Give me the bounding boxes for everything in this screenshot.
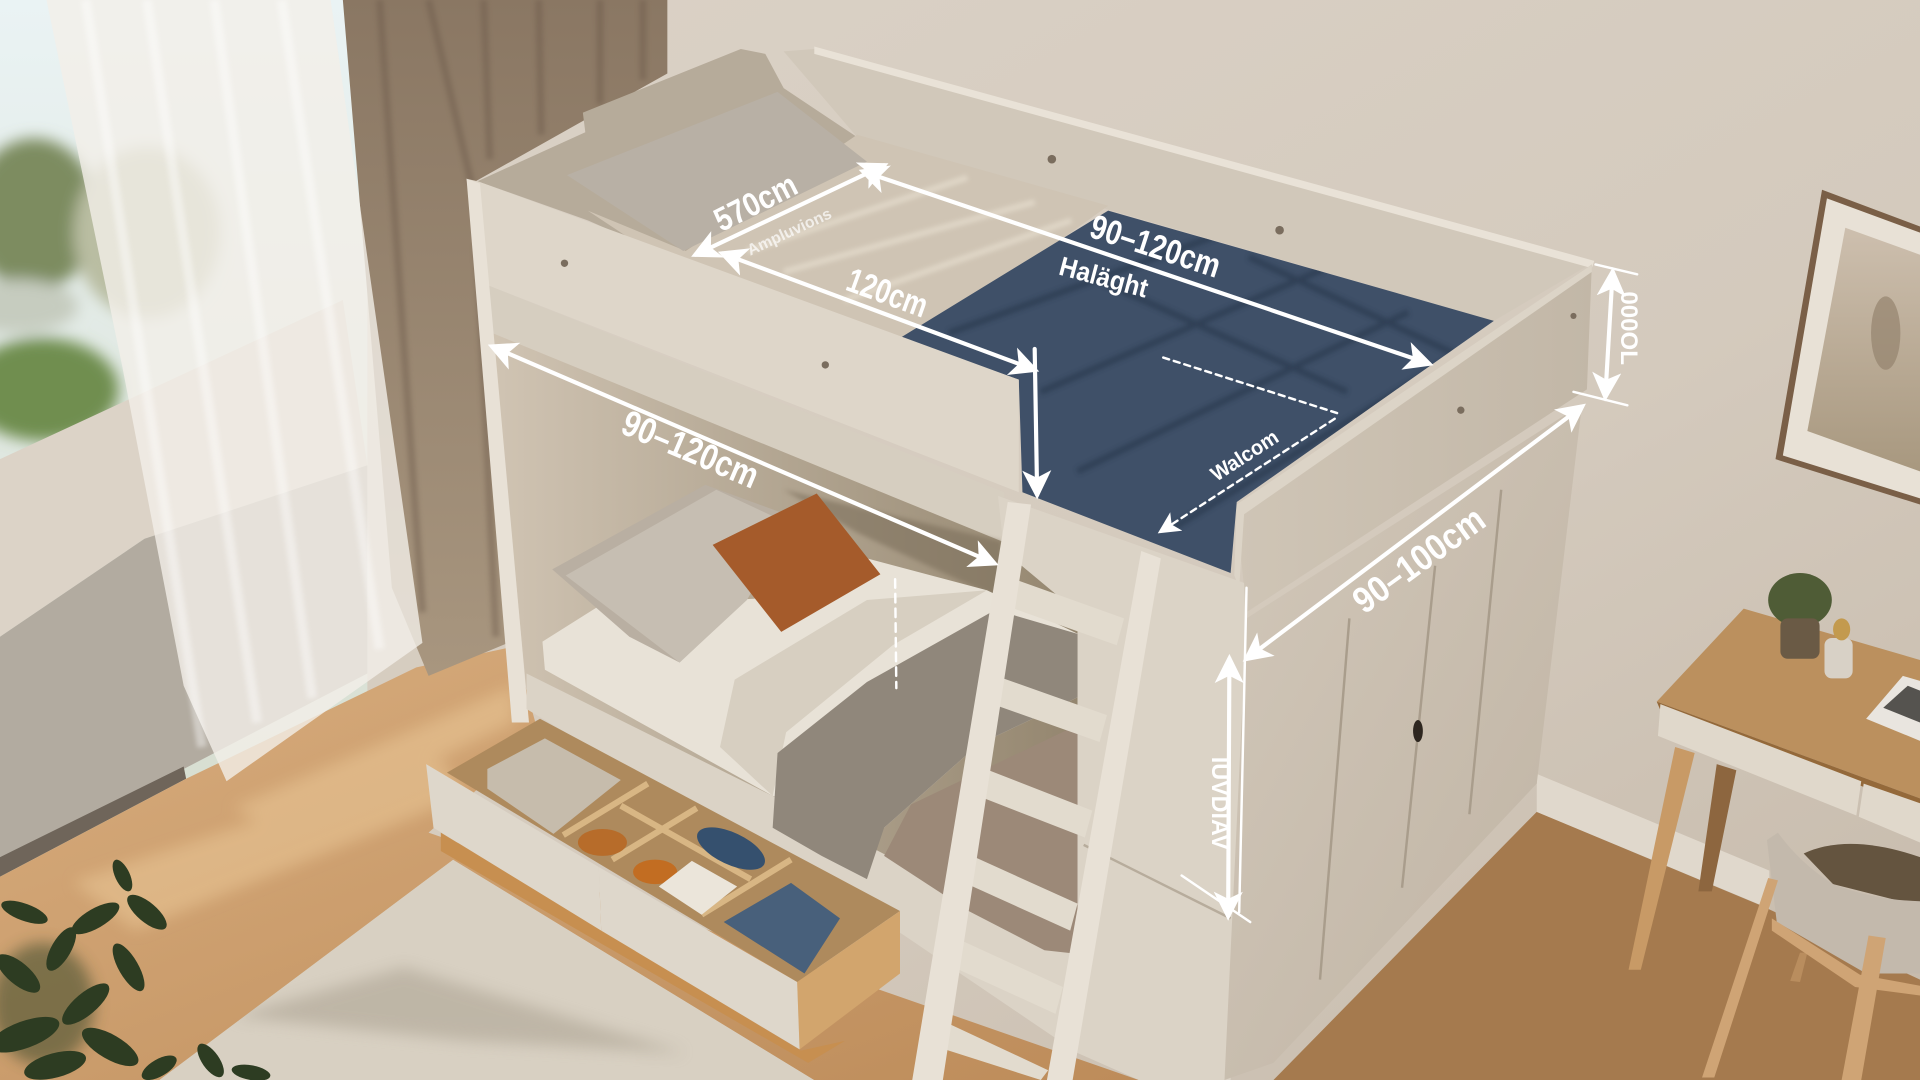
drawer fronts <box>426 764 601 931</box>
arrow: column height <box>1182 588 1250 922</box>
label: 120cm: 120cm <box>842 261 933 325</box>
floor right <box>1273 812 1920 1080</box>
desk legs <box>1629 747 1695 970</box>
ladder rails <box>912 502 1031 1080</box>
left post <box>467 179 529 722</box>
window view <box>0 0 367 882</box>
upper pillow <box>567 92 867 251</box>
lower mattress <box>542 558 1079 954</box>
side rail screws <box>561 155 1577 414</box>
label: 570cm: 570cm <box>708 166 804 239</box>
drawer wood base <box>441 833 845 1063</box>
dimension arrows <box>492 165 1637 922</box>
front guard panel <box>467 179 1019 492</box>
baseboard <box>1537 774 1769 909</box>
bunk bed <box>467 47 1594 1080</box>
desk plant <box>1768 573 1832 659</box>
label: column height: IUVDIAV <box>1206 757 1233 850</box>
label: guard height: 000OL <box>1615 291 1642 365</box>
orange cushion <box>713 493 880 632</box>
arrow: vertical height <box>1035 349 1037 495</box>
storage drawers <box>426 719 900 1063</box>
drawer dividers <box>563 784 791 915</box>
folded towels <box>487 738 621 834</box>
wardrobe side <box>1224 404 1582 1080</box>
headboard <box>478 49 857 263</box>
label: lower 90-120cm: 90–120cm <box>616 402 765 496</box>
upper mattress <box>588 135 1108 355</box>
arrow: 90-100cm <box>1247 407 1582 659</box>
upper bunk back wall <box>784 49 1592 321</box>
blue socks <box>691 819 771 879</box>
desk drawers <box>1658 704 1861 816</box>
desk cup <box>1824 618 1853 678</box>
door handle <box>1413 720 1423 742</box>
lower pillow <box>552 485 790 662</box>
front lower rail <box>485 284 1004 541</box>
orange items <box>578 829 627 856</box>
bottom sheet fold <box>720 590 987 796</box>
arrow: 570cm <box>696 165 884 255</box>
end panel upper <box>1234 264 1592 612</box>
label: mattress width: Walcom <box>1207 426 1283 486</box>
label: faint caption: Ampluvions <box>745 205 835 259</box>
right column front <box>998 496 1247 1080</box>
blue jeans <box>724 883 840 973</box>
label: height: Haläght <box>1056 251 1151 304</box>
sheer curtain <box>47 0 422 781</box>
chair <box>1702 833 1920 1080</box>
shadow under rail <box>784 490 1002 600</box>
balcony wall <box>0 300 367 637</box>
desk top <box>1657 609 1920 798</box>
trees outside <box>0 138 220 441</box>
magazine <box>1866 676 1920 741</box>
arrow: top 90-120cm <box>863 171 1429 364</box>
under bunk wall <box>492 333 1078 955</box>
desk <box>1629 573 1920 970</box>
brown bed end <box>884 725 1078 954</box>
balcony tiles <box>0 465 367 857</box>
label: 90-100cm: 90–100cm <box>1345 498 1493 621</box>
arrow: guard height <box>1573 264 1637 405</box>
rug <box>159 860 814 1080</box>
ladder rungs <box>926 576 1124 1080</box>
navy blanket <box>900 211 1494 573</box>
floor sunlight streaks <box>73 686 514 931</box>
dashed arrow: clearance <box>895 579 896 688</box>
window sill <box>0 767 186 877</box>
arrow: lower 90-120cm <box>492 347 994 563</box>
floor left <box>0 647 1139 1080</box>
picture frame <box>1776 190 1920 504</box>
plant bottom left <box>0 857 272 1080</box>
arrow: 120cm <box>722 253 1035 370</box>
grey throw <box>773 610 1079 879</box>
plant leaves <box>0 857 272 1080</box>
upper bunk top rim <box>814 47 1594 268</box>
ladder <box>912 502 1161 1080</box>
white shirt <box>659 861 737 915</box>
lower bed base <box>527 673 1078 1053</box>
dashed arrow: mattress width <box>1161 358 1340 531</box>
drawer interior <box>447 719 900 982</box>
lower column seam <box>1084 845 1231 918</box>
label: top 90-120cm: 90–120cm <box>1085 208 1225 286</box>
brown curtain <box>343 0 667 676</box>
drawer right side <box>797 911 900 1049</box>
